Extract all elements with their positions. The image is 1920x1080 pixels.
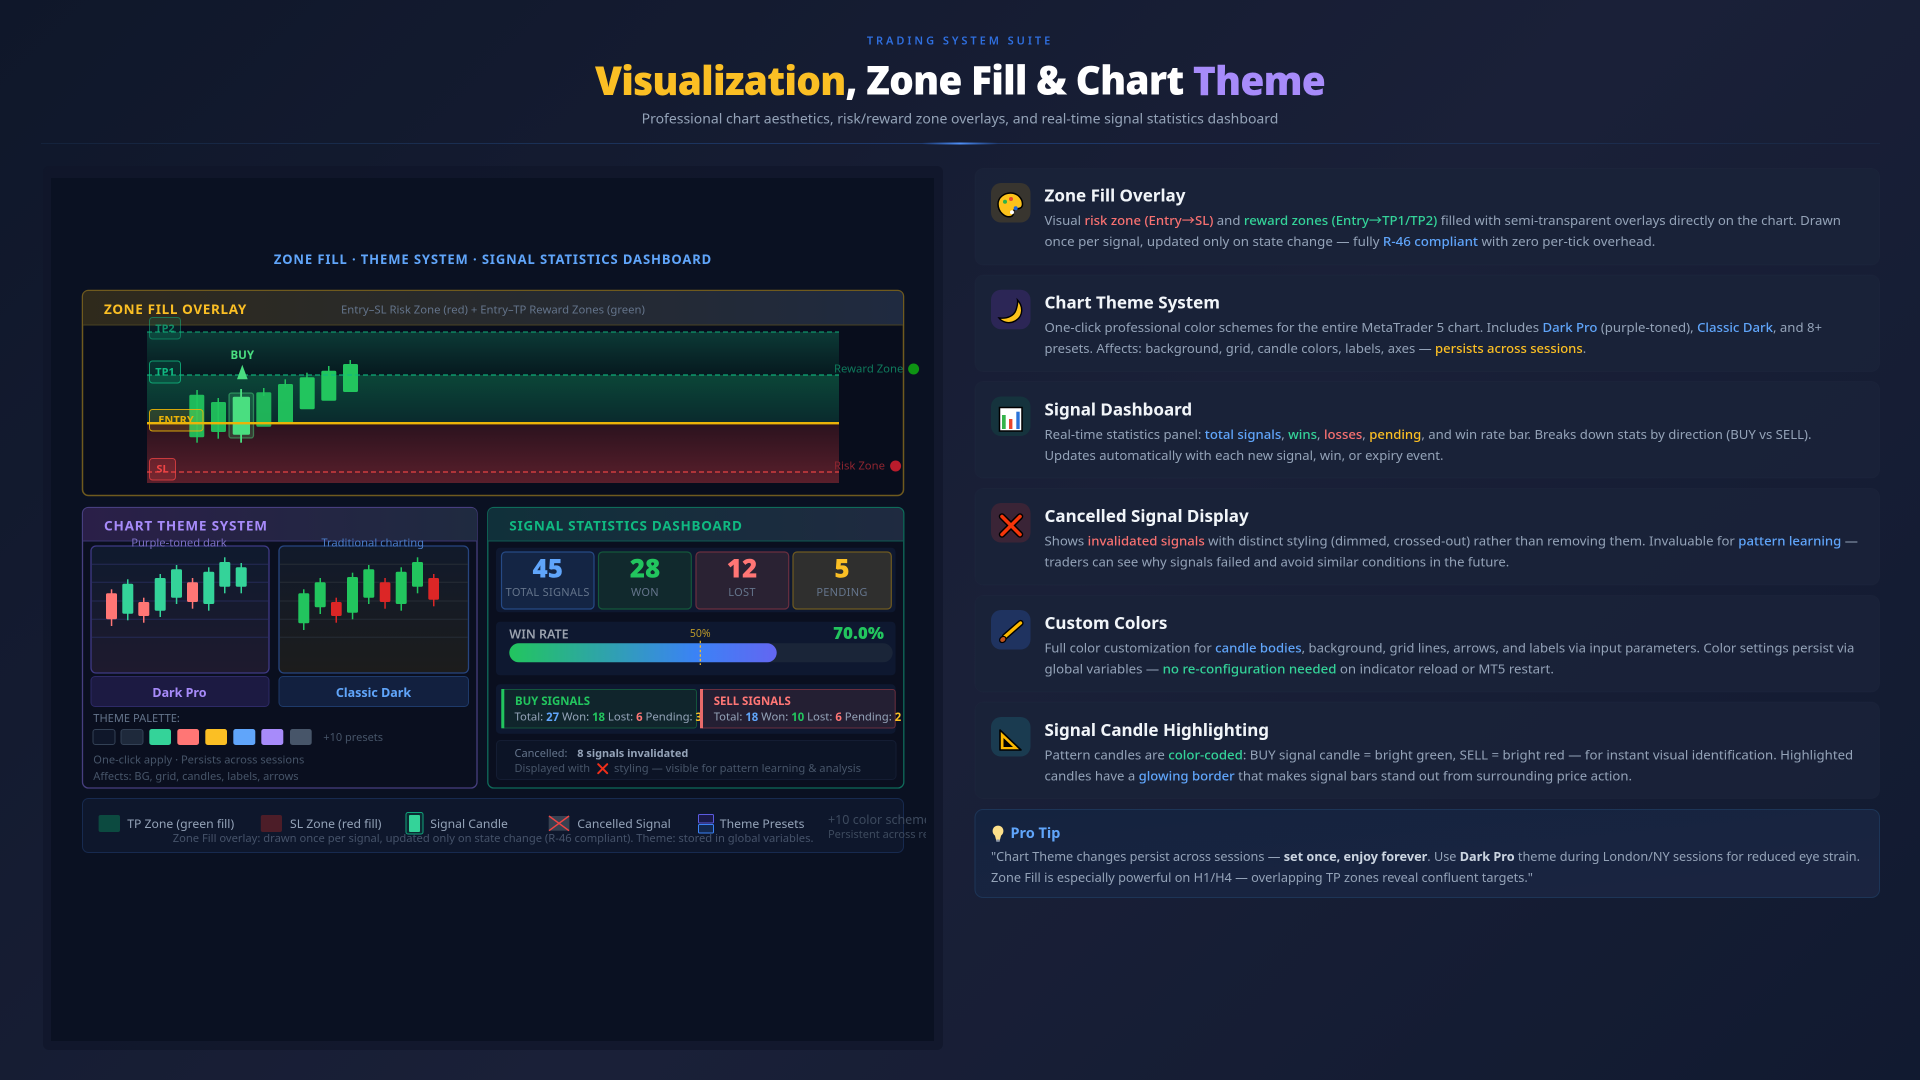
classic dark button <box>279 676 468 706</box>
sell signals <box>700 689 902 728</box>
stat: pending: 5 <box>834 550 850 586</box>
feature description: Full color customization for candle bodies, background, grid lines, arrows, and labels via input parameters. Color settings persist via <box>1044 638 1854 656</box>
title: Visualization, Zone Fill & Chart Theme <box>595 52 1325 106</box>
theme notes: Affects: BG, grid, candles, labels, arrows <box>93 769 299 784</box>
legend: theme presets: Theme Presets <box>720 815 805 832</box>
legend: overflow note: Persistent across restarts <box>828 827 958 842</box>
stat: won: WON <box>631 585 659 600</box>
feature title: Signal Dashboard <box>1044 398 1192 420</box>
buy signals: BUY SIGNALS <box>515 694 590 709</box>
cancelled note <box>496 740 896 780</box>
sell signals: SELL SIGNALS <box>714 694 791 709</box>
feature description <box>1044 532 1858 570</box>
eyebrow label: TRADING SYSTEM SUITE <box>867 34 1053 48</box>
theme notes <box>93 752 304 784</box>
feature description <box>1044 425 1812 464</box>
left panel: infographic board <box>43 166 958 1050</box>
risk zone fill <box>147 423 839 483</box>
classic dark mini chart <box>279 546 468 673</box>
stat row <box>496 548 896 612</box>
reward zone label: Reward Zone <box>834 362 903 376</box>
legend: cancelled signal: Cancelled Signal <box>577 815 671 832</box>
feature title: Chart Theme System <box>1044 290 1220 314</box>
subtitle: Professional chart aesthetics, risk/reward zone overlays, and real-time signal statistics dashboard <box>642 110 1278 128</box>
buy arrow: BUY <box>231 348 255 363</box>
stat: won <box>598 550 691 609</box>
feature title: Cancelled Signal Display <box>1044 504 1249 527</box>
cancelled note: 8 signals invalidated <box>577 746 688 761</box>
feature description <box>1044 318 1822 357</box>
legend: TP zone: TP Zone (green fill) <box>127 815 234 832</box>
feature title: Zone Fill Overlay <box>1044 184 1186 206</box>
board heading: ZONE FILL · THEME SYSTEM · SIGNAL STATISTICS DASHBOARD <box>274 250 712 268</box>
icon: cross <box>991 503 1030 542</box>
pro tip heading: Pro Tip <box>1010 823 1060 843</box>
theme palette: +10 presets <box>323 730 383 745</box>
pro tip text <box>991 847 1860 886</box>
feature description: Pattern candles are color-coded: BUY signal candle = bright green, SELL = bright red — for instant visual identification. Highlighted <box>1044 746 1853 764</box>
dark pro caption: Purple-toned dark <box>131 536 227 550</box>
feature description: Visual risk zone (Entry→SL) and reward zones (Entry→TP1/TP2) filled with semi-transparent overlays directly on the chart. Drawn <box>1044 211 1841 229</box>
cancelled note: Displayed with <box>514 761 590 776</box>
zone panel header: ZONE FILL OVERLAY <box>104 300 247 318</box>
feature description: once per signal, updated only on state change — fully R-46 compliant with zero per-tick overhead. <box>1044 232 1655 250</box>
label: entry <box>150 410 203 431</box>
win rate: 50% <box>690 627 711 641</box>
legend: signal candle <box>406 812 508 834</box>
label: SL: SL <box>156 462 169 476</box>
reward zone fill <box>147 332 839 423</box>
win rate: WIN RATE <box>509 626 569 642</box>
feature description: presets. Affects: background, grid, candle colors, labels, axes — persists across sessions. <box>1044 339 1586 357</box>
stat: pending <box>793 550 891 609</box>
feature: signal dashboard <box>975 382 1880 478</box>
stat: lost: LOST <box>728 585 756 600</box>
icon: moon <box>991 290 1030 329</box>
stat: total signals: TOTAL SIGNALS <box>506 585 590 600</box>
pro tip text: "Chart Theme changes persist across sessions — set once, enjoy forever. Use Dark Pro theme during London/NY sessions for reduced eye strain. <box>991 847 1860 865</box>
panel: signal statistics dashboard <box>488 508 904 788</box>
sell signals: Total: 18 Won: 10 Lost: 6 Pending: 2 <box>714 710 902 724</box>
buy arrow <box>231 348 255 379</box>
icon: light bulb <box>993 826 1003 842</box>
feature description <box>1044 746 1853 784</box>
risk zone label: Risk Zone <box>834 458 885 474</box>
win rate <box>496 621 896 675</box>
legend: signal candle: Signal Candle <box>430 815 508 832</box>
stat: pending: PENDING <box>816 585 868 600</box>
buy signals: Total: 27 Won: 18 Lost: 6 Pending: 3 <box>514 710 703 724</box>
icon: small red cross <box>598 764 607 773</box>
feature description: candles have a glowing border that makes signal bars stand out from surrounding price action. <box>1044 766 1632 784</box>
stat: total signals <box>502 550 594 609</box>
feature: zone fill overlay <box>975 168 1880 265</box>
classic dark button: Classic Dark <box>336 684 411 701</box>
entry line <box>147 422 839 424</box>
panel: zone fill overlay <box>82 290 919 496</box>
buy and sell breakdown <box>496 684 902 734</box>
feature description: traders can see why signals failed and avoid similar conditions in the future. <box>1044 552 1509 570</box>
label: TP2 <box>150 318 180 339</box>
feature description <box>1044 211 1841 250</box>
feature: cancelled signal display <box>975 488 1880 585</box>
feature description: Updates automatically with each new signal, win, or expiry event. <box>1044 446 1444 464</box>
feature title: Signal Candle Highlighting <box>1044 718 1269 741</box>
theme panel header <box>83 508 477 542</box>
dark pro button: Dark Pro <box>152 684 207 701</box>
pro tip text: Zone Fill is especially powerful on H1/H4 — overlapping TP zones reveal confluent targets." <box>991 868 1533 886</box>
SL line <box>147 471 839 473</box>
cancelled note: styling — visible for pattern learning & analysis <box>614 761 861 776</box>
legend: SL zone: SL Zone (red fill) <box>290 815 382 832</box>
feature description <box>1044 638 1854 678</box>
label: TP2: TP2 <box>155 321 175 336</box>
label: entry: ENTRY <box>158 412 194 428</box>
feature description: global variables — no re-configuration needed on indicator reload or MT5 restart. <box>1044 660 1554 678</box>
legend: overflow note: +10 color schemes <box>828 811 937 828</box>
feature description: Real-time statistics panel: total signals, wins, losses, pending, and win rate bar. Breaks down stats by direction (BUY vs SELL). <box>1044 425 1812 443</box>
header divider glow <box>41 142 1880 144</box>
feature description: Shows invalidated signals with distinct styling (dimmed, crossed-out) rather than removing them. Invaluable for pattern learning — <box>1044 532 1858 550</box>
feature title: Custom Colors <box>1044 611 1167 634</box>
stat: won: 28 <box>630 550 660 586</box>
feature description: One-click professional color schemes for the entire MetaTrader 5 chart. Includes Dark Pro (purple-toned), Classic Dark, and 8+ <box>1044 318 1822 336</box>
label: SL <box>150 458 176 480</box>
panel: feature list <box>975 168 1880 898</box>
callout: pro tip <box>975 810 1880 898</box>
stat: total signals: 45 <box>532 550 563 586</box>
legend <box>82 798 958 852</box>
panel: chart theme system <box>82 508 477 788</box>
theme palette <box>93 711 383 745</box>
dark pro button <box>91 676 269 706</box>
label: TP1 <box>150 361 180 383</box>
candlesticks <box>189 360 358 443</box>
icon: palette <box>991 183 1030 222</box>
icon: set square <box>991 717 1030 756</box>
feature: chart theme system <box>975 275 1880 372</box>
cancelled note: Cancelled: <box>514 746 568 761</box>
win rate: 70.0% <box>833 621 884 644</box>
legend: overflow note <box>828 814 926 838</box>
TP2 line <box>147 331 839 333</box>
buy signals <box>501 689 703 728</box>
theme palette: THEME PALETTE: <box>93 711 180 726</box>
legend footnote: Zone Fill overlay: drawn once per signal, updated only on state change (R-46 compliant). Theme: stored in global variables. <box>173 831 813 846</box>
theme panel header: CHART THEME SYSTEM <box>104 517 268 535</box>
feature: signal candle highlighting <box>975 702 1880 798</box>
icon: brush <box>991 610 1030 650</box>
feature: custom colors <box>975 596 1880 692</box>
stat: lost <box>696 550 789 609</box>
icon: bar chart <box>991 396 1030 436</box>
dark pro mini chart <box>91 546 269 673</box>
TP1 line <box>147 374 839 376</box>
dashboard header <box>488 508 904 542</box>
theme notes: One-click apply · Persists across sessions <box>93 752 304 768</box>
zone panel header <box>83 291 903 326</box>
stat: lost: 12 <box>727 550 757 586</box>
classic dark caption: Traditional charting <box>321 536 424 550</box>
dashboard header: SIGNAL STATISTICS DASHBOARD <box>509 517 743 535</box>
zone panel header: Entry–SL Risk Zone (red) + Entry–TP Reward Zones (green) <box>341 302 645 318</box>
label: TP1: TP1 <box>155 364 175 380</box>
header <box>41 34 1880 144</box>
